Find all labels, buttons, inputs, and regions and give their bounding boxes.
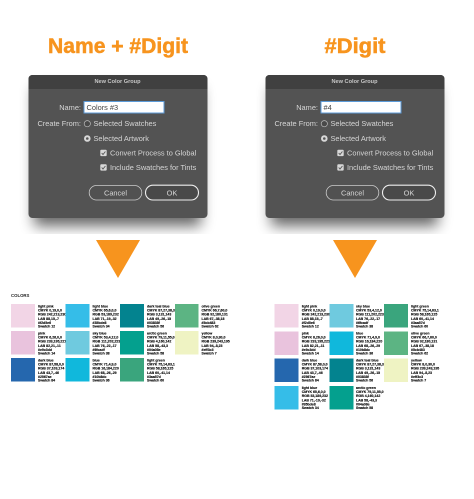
swatch: light green: Swatch 60 — [147, 379, 164, 383]
swatch: blue: LAB 68,-26,-29 — [356, 344, 380, 348]
panel: left swatch sheet — [11, 293, 230, 383]
swatch: teal: RGB 4,160,142 — [147, 340, 171, 344]
swatch: light green: RGB 58,165,125 — [147, 367, 173, 371]
swatch: yellow: RGB 239,243,195 — [202, 340, 230, 344]
ok button — [382, 185, 436, 200]
swatch: dark teal: Swatch 56 — [147, 325, 164, 329]
swatch: light pink: CMYK 0,19,0,0 — [38, 309, 62, 313]
swatch: pink: RGB 233,195,221 — [302, 340, 330, 344]
swatch: blue — [330, 332, 382, 356]
swatch: green: Swatch 62 — [202, 325, 219, 329]
panel: right dialog — [266, 75, 444, 226]
swatch: blue: CMYK 71,4,9,0 — [92, 363, 116, 367]
swatch: dark blue: RGB 37,103,174 — [302, 367, 328, 371]
swatch: sky blue: #6fcadf — [92, 348, 106, 352]
swatch: green — [175, 304, 228, 329]
swatch: light green — [120, 358, 175, 383]
swatch: blue: RGB 16,184,220 — [356, 340, 382, 344]
create from label: Create From: — [274, 119, 318, 128]
name input: #4 — [324, 103, 332, 112]
swatch: sky blue — [66, 331, 120, 356]
ok button: OK — [167, 188, 177, 198]
swatch: pink: pink — [38, 332, 45, 336]
radio: selected swatches: Selected Swatches — [330, 119, 394, 128]
swatch: light blue: LAB 71,-19,-32 — [92, 317, 117, 321]
swatch: sky blue: Swatch 38 — [356, 325, 373, 329]
swatch: teal: LAB 58,-43,3 — [147, 344, 168, 348]
swatch: dark blue: dark blue — [38, 358, 54, 362]
swatch: light blue: RGB 53,189,232 — [302, 394, 328, 398]
swatch: green: olive green — [411, 332, 429, 336]
swatch: light blue — [274, 386, 328, 410]
radio: selected artwork: Selected Artwork — [94, 134, 149, 143]
cancel button — [89, 186, 142, 200]
swatch: light pink — [11, 304, 66, 329]
swatch: dark blue: #2567ae — [302, 375, 315, 379]
swatch: teal: arctic green — [147, 332, 167, 336]
swatch: green: #5cb483 — [411, 348, 425, 352]
swatch: teal: #04a08e — [147, 348, 161, 352]
swatch: yellow: Swatch 7 — [411, 379, 426, 383]
swatch: light blue: light blue — [302, 386, 317, 390]
swatch: yellow: Swatch 7 — [202, 352, 217, 356]
swatch: green: Swatch 62 — [411, 352, 428, 356]
swatch: blue: blue — [356, 332, 363, 336]
swatch: light green: CMYK 75,14,63,1 — [411, 309, 439, 313]
swatch: dark teal: LAB 49,-26,-15 — [147, 317, 171, 321]
swatch: dark blue — [274, 358, 328, 383]
swatch: dark teal: RGB 3,131,143 — [147, 313, 171, 317]
swatch: dark teal: CMYK 87,27,38,3 — [356, 363, 384, 367]
swatch: pink: Swatch 14 — [302, 352, 319, 356]
swatch: green: LAB 67,-38,18 — [411, 344, 434, 348]
swatch: light blue: #35bde8 — [92, 321, 107, 325]
swatch: green: CMYK 66,7,60,0 — [202, 309, 227, 313]
swatch: dark blue — [11, 358, 64, 383]
swatch: yellow — [175, 331, 230, 356]
dialog title: New Color Group — [94, 79, 141, 85]
dialog title: New Color Group — [332, 79, 378, 85]
swatch: blue — [66, 358, 119, 383]
panel: right swatch sheet — [274, 304, 439, 410]
swatch: light pink: light pink — [302, 304, 317, 308]
swatch: yellow: #eff3c3 — [411, 375, 423, 379]
swatch: blue: Swatch 36 — [92, 379, 110, 383]
cancel button: Cancel — [104, 188, 127, 198]
swatch: light blue: CMYK 65,6,0,0 — [92, 309, 116, 313]
swatch: teal: CMYK 79,11,55,0 — [147, 336, 175, 340]
swatch: sky blue: CMYK 53,4,12,0 — [356, 309, 382, 313]
swatch: green: RGB 92,180,131 — [411, 340, 437, 344]
swatch: green: LAB 67,-38,18 — [202, 317, 225, 321]
swatch: yellow — [384, 358, 439, 383]
arrow: left down triangle — [96, 240, 140, 278]
swatch: teal: LAB 58,-43,3 — [356, 398, 377, 402]
swatch: light blue: light blue — [92, 304, 108, 308]
arrow: right down triangle — [333, 240, 377, 278]
checkbox: convert process to global: Convert Process to Global — [110, 148, 197, 158]
swatch: dark teal: LAB 49,-26,-15 — [356, 371, 380, 375]
swatch: light pink: #f2d5e6 — [38, 321, 51, 325]
dialog title bar — [266, 75, 444, 89]
swatch: dark blue: CMYK 87,58,0,0 — [302, 363, 328, 367]
swatch: dark teal — [330, 358, 384, 383]
swatch: light green: LAB 60,-41,14 — [147, 371, 170, 375]
swatch: sky blue: CMYK 53,4,12,0 — [92, 336, 118, 340]
swatch: light pink: light pink — [38, 304, 54, 308]
swatch: dark blue: Swatch 84 — [38, 379, 55, 383]
sheet heading: COLORS — [11, 293, 30, 298]
swatch: light pink: Swatch 12 — [302, 325, 319, 329]
swatch: teal: #04a08e — [356, 402, 370, 406]
swatch: light blue: LAB 71,-19,-32 — [302, 398, 326, 402]
swatch: sky blue: LAB 76,-22,-17 — [92, 344, 117, 348]
swatch: light pink: RGB 242,213,230 — [38, 313, 66, 317]
swatch: dark blue: #2567ae — [38, 375, 52, 379]
swatch: green: CMYK 66,7,60,0 — [411, 336, 437, 340]
swatch: pink: LAB 82,21,-11 — [302, 344, 325, 348]
swatch: dark blue: dark blue — [302, 358, 317, 362]
swatch: light pink — [274, 304, 330, 329]
name input — [84, 102, 164, 113]
swatch: yellow: RGB 239,243,195 — [411, 367, 439, 371]
swatch: teal: Swatch 58 — [356, 406, 373, 410]
swatch: sky blue: sky blue — [356, 304, 370, 308]
panel: left dialog — [28, 75, 208, 226]
swatch: teal: CMYK 79,11,55,0 — [356, 390, 384, 394]
swatch: light pink: LAB 88,15,-7 — [38, 317, 59, 321]
swatch: light blue: RGB 53,189,232 — [92, 313, 119, 317]
swatch: pink: CMYK 6,26,0,0 — [38, 336, 62, 340]
swatch: yellow: yellow — [202, 332, 212, 336]
swatch: yellow: LAB 94,-8,23 — [411, 371, 432, 375]
ok button: OK — [404, 188, 414, 198]
swatch: green: RGB 92,180,131 — [202, 313, 228, 317]
swatch: light green: #3aa57d — [147, 375, 161, 379]
swatch: yellow: #eff3c3 — [202, 348, 214, 352]
swatch: dark teal: #03838f — [356, 375, 370, 379]
swatch: light pink: LAB 88,15,-7 — [302, 317, 323, 321]
swatch: yellow: LAB 94,-8,23 — [202, 344, 223, 348]
swatch: light blue: #35bde8 — [302, 402, 316, 406]
heading: Name + #Digit: Name + #Digit — [48, 34, 188, 58]
swatch: dark blue: LAB 43,7,-46 — [302, 371, 323, 375]
swatch: light blue: CMYK 65,6,0,0 — [302, 390, 326, 394]
dialog title bar — [28, 75, 208, 89]
swatch: pink — [11, 331, 66, 356]
heading: #Digit: #Digit — [324, 34, 386, 58]
swatch: light green: #3aa57d — [411, 321, 425, 325]
swatch: teal: Swatch 58 — [147, 352, 164, 356]
ok button — [146, 185, 198, 200]
name input — [321, 102, 401, 113]
checkbox: include swatches for tints: Include Swatches for Tints — [110, 163, 197, 172]
swatch: light blue: Swatch 34 — [92, 325, 110, 329]
swatch: pink: CMYK 6,26,0,0 — [302, 336, 326, 340]
swatch: yellow: yellow — [411, 358, 422, 362]
swatch: dark blue: Swatch 84 — [302, 379, 319, 383]
swatch: light green: RGB 58,165,125 — [411, 313, 437, 317]
swatch: dark blue: CMYK 87,58,0,0 — [38, 363, 64, 367]
swatch: sky blue: RGB 111,202,223 — [356, 313, 384, 317]
swatch: teal: arctic green — [356, 386, 376, 390]
swatch: blue: CMYK 71,4,9,0 — [356, 336, 380, 340]
swatch: light green: Swatch 60 — [411, 325, 428, 329]
create from label: Create From: — [37, 119, 81, 128]
swatch: blue: RGB 16,184,220 — [92, 367, 119, 371]
swatch: light green: LAB 60,-41,14 — [411, 317, 434, 321]
swatch: dark teal: dark teal blue — [356, 358, 379, 362]
swatch: teal — [120, 331, 175, 356]
swatch: yellow: CMYK 8,0,30,0 — [411, 363, 435, 367]
swatch: blue: #10b8dc — [356, 348, 370, 352]
swatch: pink: pink — [302, 332, 309, 336]
swatch: dark teal: RGB 3,131,143 — [356, 367, 380, 371]
radio: selected artwork: Selected Artwork — [330, 134, 386, 143]
swatch: blue: blue — [92, 358, 100, 362]
swatch: teal: RGB 4,160,142 — [356, 394, 380, 398]
name input: Colors #3 — [86, 103, 118, 112]
swatch: dark teal: CMYK 87,27,38,3 — [147, 309, 175, 313]
swatch: dark teal: #03838f — [147, 321, 161, 325]
cancel button: Cancel — [341, 188, 364, 198]
swatch: green: #5cb483 — [202, 321, 215, 325]
swatch: light green: light green — [147, 358, 165, 362]
swatch: dark teal — [120, 304, 175, 329]
swatch: pink: #e9c3dd — [38, 348, 52, 352]
checkbox: convert process to global: Convert Process to Global — [347, 148, 434, 158]
swatch: sky blue: Swatch 38 — [92, 352, 110, 356]
swatch: blue: #10b8dc — [92, 375, 107, 379]
swatch: light blue: Swatch 34 — [302, 406, 319, 410]
swatch: sky blue: RGB 111,202,223 — [92, 340, 120, 344]
swatch: light pink: Swatch 12 — [38, 325, 55, 329]
checkbox: include swatches for tints: Include Swatches for Tints — [347, 163, 434, 172]
swatch: green: olive green — [202, 304, 220, 308]
swatch: pink: LAB 82,21,-11 — [38, 344, 61, 348]
swatch: dark blue: RGB 37,103,174 — [38, 367, 64, 371]
swatch: green — [384, 332, 437, 356]
swatch: light pink: RGB 242,213,230 — [302, 313, 330, 317]
radio: selected swatches: Selected Swatches — [94, 119, 157, 128]
swatch: light green — [384, 304, 439, 329]
swatch: dark teal: dark teal blue — [147, 304, 170, 308]
swatch: light green: CMYK 75,14,63,1 — [147, 363, 175, 367]
name label: Name: — [59, 103, 81, 112]
swatch: dark teal: Swatch 56 — [356, 379, 373, 383]
swatch: pink: Swatch 14 — [38, 352, 55, 356]
swatch: teal — [330, 386, 384, 410]
swatch: blue: Swatch 36 — [356, 352, 373, 356]
swatch: light pink: #f2d5e6 — [302, 321, 315, 325]
swatch: sky blue — [330, 304, 384, 329]
swatch: pink: #e9c3dd — [302, 348, 316, 352]
swatch: sky blue: LAB 76,-22,-17 — [356, 317, 380, 321]
swatch: blue: LAB 68,-26,-29 — [92, 371, 117, 375]
swatch: light green: light green — [411, 304, 429, 308]
cancel button — [326, 186, 379, 200]
name label: Name: — [296, 103, 318, 112]
swatch: pink: RGB 233,195,221 — [38, 340, 66, 344]
swatch: light blue — [66, 304, 119, 329]
swatch: yellow: CMYK 8,0,30,0 — [202, 336, 225, 340]
swatch: sky blue: #6fcadf — [356, 321, 369, 325]
swatch: light pink: CMYK 0,19,0,0 — [302, 309, 326, 313]
swatch: pink — [274, 332, 330, 356]
swatch: dark blue: LAB 43,7,-46 — [38, 371, 59, 375]
swatch: sky blue: sky blue — [92, 332, 107, 336]
